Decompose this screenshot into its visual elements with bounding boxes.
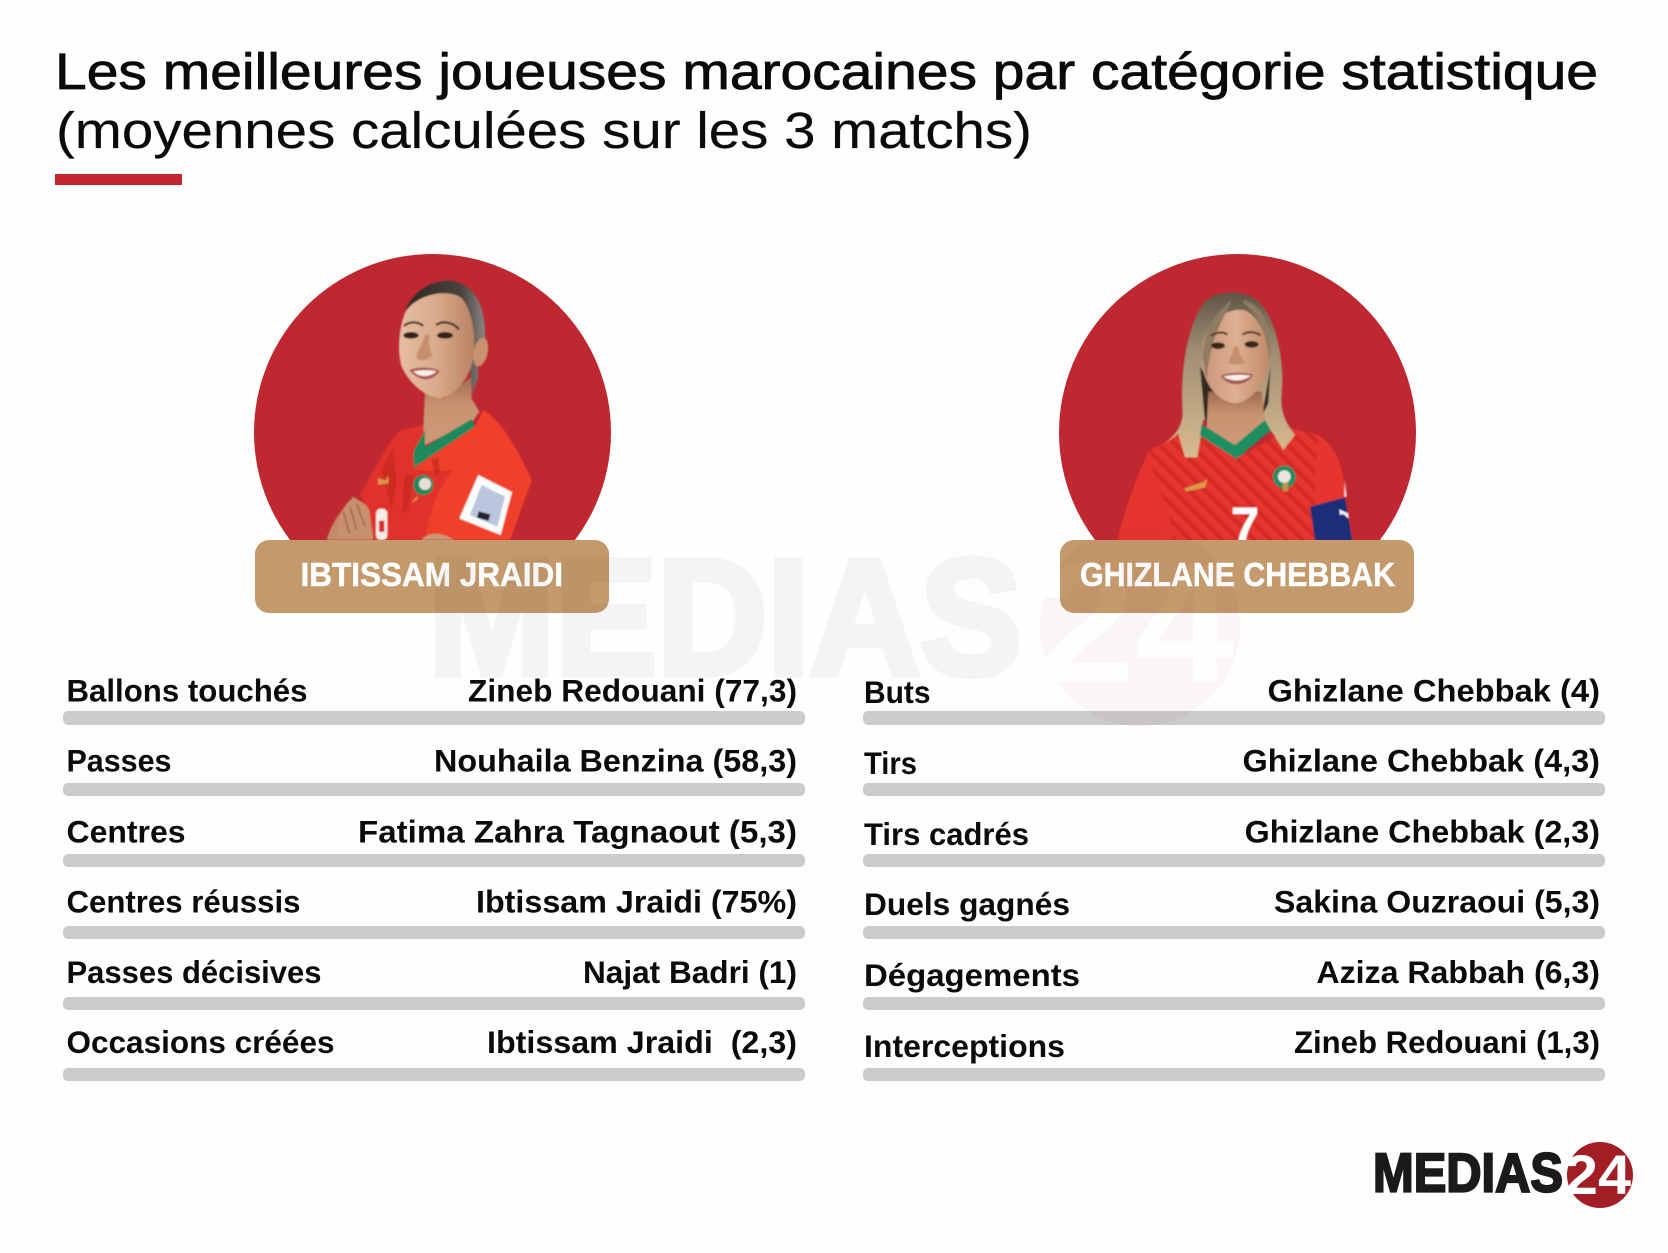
row: Passes: Passes	[66, 742, 172, 778]
row: Duels gagnés: Duels gagnés	[864, 886, 1070, 922]
row: Occasions créées	[63, 1024, 805, 1081]
title: (moyennes calculées sur les 3 matchs)	[56, 102, 1032, 159]
row: Buts: Ghizlane Chebbak (4)	[1268, 672, 1600, 708]
row: Passes décisives	[63, 954, 805, 1010]
red circle	[254, 254, 611, 611]
row: Occasions créées: Ibtissam Jraidi (2,3)	[487, 1024, 797, 1060]
row: Duels gagnés	[863, 884, 1605, 939]
name badge	[255, 540, 609, 613]
row: Occasions créées: Occasions créées	[66, 1024, 334, 1060]
row: Centres réussis	[63, 884, 805, 939]
row: Dégagements: Aziza Rabbah (6,3)	[1316, 954, 1600, 990]
row: Tirs: Tirs	[864, 745, 917, 781]
row: Centres réussis: Ibtissam Jraidi (75%)	[476, 884, 797, 920]
logo: MEDIAS24: MEDIAS	[1373, 1142, 1563, 1204]
watermark: MEDIAS24: MEDIAS	[428, 525, 1022, 709]
row: Ballons touchés: Zineb Redouani (77,3)	[468, 672, 797, 708]
row: Passes décisives: Passes décisives	[66, 954, 322, 990]
row: Buts	[863, 672, 1605, 725]
row: Interceptions: Zineb Redouani (1,3)	[1294, 1024, 1600, 1060]
watermark: MEDIAS24: 24	[1036, 529, 1234, 719]
row: Centres réussis: Centres réussis	[66, 884, 300, 920]
row: Buts: Buts	[864, 674, 930, 710]
title	[55, 43, 1598, 159]
name badge	[1060, 540, 1414, 613]
row: Tirs cadrés: Ghizlane Chebbak (2,3)	[1245, 814, 1600, 850]
title: Les meilleures joueuses marocaines par catégorie statistique	[55, 43, 1598, 100]
row: Tirs cadrés	[863, 814, 1605, 867]
row: Passes: Nouhaila Benzina (58,3)	[434, 742, 797, 778]
row: Tirs	[863, 742, 1605, 796]
row: Interceptions	[863, 1024, 1605, 1081]
panel: right statistics table	[863, 672, 1605, 1081]
name badge: GHIZLANE CHEBBAK	[1080, 557, 1395, 594]
row: Centres: Fatima Zahra Tagnaout (5,3)	[358, 814, 797, 850]
row: Tirs: Ghizlane Chebbak (4,3)	[1242, 742, 1600, 778]
player photo illustration: Ibtissam Jraidi	[327, 281, 532, 540]
row: Passes	[63, 742, 805, 796]
row: Dégagements: Dégagements	[864, 957, 1080, 993]
player photo illustration: Ghizlane Chebbak	[1118, 292, 1353, 560]
row: Centres	[63, 814, 805, 867]
red circle	[1059, 254, 1416, 611]
row: Centres: Centres	[66, 814, 186, 850]
row: Ballons touchés: Ballons touchés	[66, 672, 308, 708]
logo: MEDIAS24: 24	[1565, 1143, 1631, 1206]
row: Passes décisives: Najat Badri (1)	[583, 954, 797, 990]
panel: left statistics table	[63, 672, 805, 1081]
panel: Ibtissam Jraidi portrait	[254, 254, 611, 613]
row: Duels gagnés: Sakina Ouzraoui (5,3)	[1274, 884, 1600, 920]
player photo illustration: Ghizlane Chebbak: 7	[1231, 497, 1259, 560]
row: Ballons touchés	[63, 672, 805, 725]
panel: Ghizlane Chebbak portrait	[1059, 254, 1416, 613]
row: Dégagements	[863, 954, 1605, 1010]
title accent bar	[55, 174, 182, 185]
name badge: IBTISSAM JRAIDI	[300, 557, 563, 594]
row: Interceptions: Interceptions	[864, 1028, 1065, 1064]
row: Tirs cadrés: Tirs cadrés	[864, 816, 1029, 852]
